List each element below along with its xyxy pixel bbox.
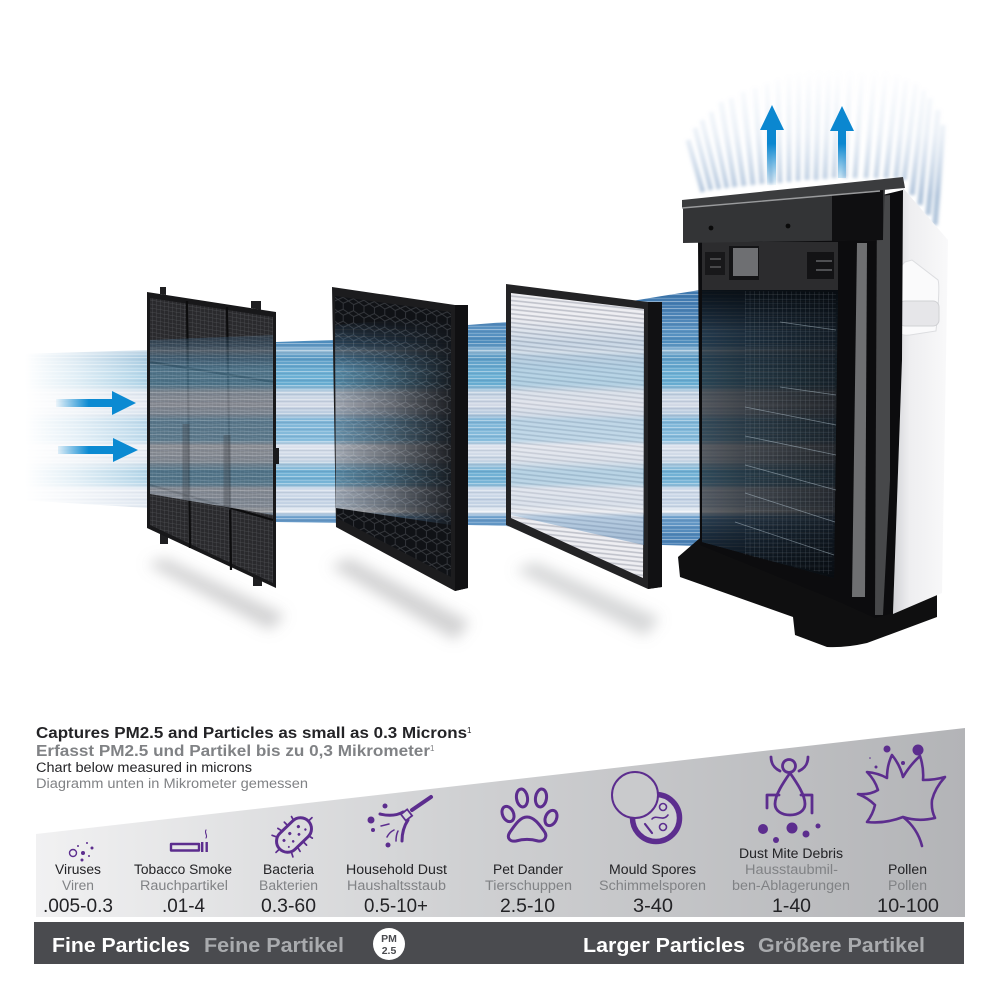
- legend bar: Feine Partikel: [204, 934, 344, 957]
- icon: PM2.5 badge: 2.5: [382, 945, 396, 957]
- filter 3: HEPA filter: [506, 284, 662, 589]
- item: bacteria: Bakterien: [259, 878, 318, 893]
- main black frame: [698, 190, 903, 618]
- item: bacteria: 0.3-60: [261, 896, 316, 917]
- item: tobacco smoke: Rauchpartikel: [140, 878, 228, 893]
- heading: Captures PM2.5 and Particles as small as 0.3 Microns: [36, 725, 467, 742]
- item: dust mite debris: Hausstaubmil-: [745, 862, 838, 877]
- shadow: filter 3: [515, 562, 660, 636]
- item: viruses: [43, 842, 113, 917]
- item: pet dander: Pet Dander: [493, 862, 564, 877]
- item: tobacco smoke: Tobacco Smoke: [134, 862, 232, 877]
- airflow band: [20, 290, 700, 546]
- legend bar: Größere Partikel: [758, 934, 925, 957]
- filter chamber: [702, 288, 838, 578]
- upward airflow rays: [688, 70, 943, 225]
- item: bacteria: Bacteria: [263, 862, 314, 877]
- icon: cigarette: [171, 830, 208, 852]
- side handle: [897, 260, 939, 335]
- item: bacteria: [259, 806, 323, 917]
- item: household dust: Household Dust: [346, 862, 447, 877]
- item: pet dander: 2.5-10: [500, 896, 555, 917]
- item: pollen: 10-100: [877, 896, 939, 917]
- legend bar: Fine Particles: [52, 934, 190, 957]
- shadow: filter 2: [330, 558, 470, 640]
- item: pollen: Pollen: [888, 878, 927, 893]
- base: [678, 538, 937, 647]
- arrow: outflow right: [830, 106, 854, 178]
- item: mould spores: [599, 772, 706, 917]
- white housing: [893, 188, 948, 614]
- item: viruses: Viruses: [55, 862, 101, 877]
- icon: petri dish: [612, 772, 680, 842]
- top lid: [682, 177, 905, 208]
- item: mould spores: Schimmelsporen: [599, 878, 706, 893]
- arrow: inflow top: [56, 391, 136, 415]
- icon: PM2.5 badge: [373, 928, 405, 960]
- arrow: outflow left: [760, 105, 784, 185]
- heading: Diagramm unten in Mikrometer gemessen: [36, 776, 308, 791]
- item: dust mite debris: ben-Ablagerungen: [732, 878, 850, 893]
- shadow: filter 1: [147, 558, 285, 630]
- control panel: [702, 242, 838, 290]
- filter 1: pre-filter: [147, 287, 279, 588]
- item: pet dander: Tierschuppen: [485, 878, 572, 893]
- item: viruses: .005-0.3: [43, 896, 113, 917]
- item: viruses: Viren: [62, 878, 94, 893]
- icon: vacuum nozzle: [368, 797, 431, 848]
- purifier unit: [678, 177, 948, 647]
- heading: 1: [467, 726, 472, 735]
- icon: bacterium: [265, 806, 323, 864]
- item: pollen: [858, 744, 945, 917]
- heading: Erfasst PM2.5 und Partikel bis zu 0,3 Mikrometer: [36, 743, 430, 760]
- item: dust mite debris: Dust Mite Debris: [739, 846, 843, 861]
- filter 2: carbon filter: [332, 287, 468, 591]
- item: dust mite debris: 1-40: [772, 896, 811, 917]
- legend bar: Larger Particles: [583, 934, 745, 957]
- item: household dust: Haushaltsstaub: [347, 878, 446, 893]
- icon: virus: [70, 842, 94, 862]
- particle size wedge: [36, 728, 965, 917]
- heading: Chart below measured in microns: [36, 760, 252, 775]
- icon: dust mite: [758, 757, 820, 843]
- arrow: inflow bottom: [58, 438, 138, 462]
- icon: PM2.5 badge: PM: [381, 933, 397, 945]
- item: tobacco smoke: .01-4: [162, 896, 205, 917]
- heading: 1: [430, 744, 435, 753]
- item: household dust: [346, 797, 447, 917]
- item: household dust: 0.5-10+: [364, 896, 428, 917]
- item: mould spores: Mould Spores: [609, 862, 696, 877]
- item: mould spores: 3-40: [633, 896, 673, 917]
- item: tobacco smoke: [134, 830, 232, 917]
- heading: [36, 725, 472, 791]
- top front band: [683, 188, 885, 243]
- frame highlight stripes: [852, 243, 867, 597]
- legend bar: [34, 922, 964, 964]
- icon: pollen flower: [858, 744, 945, 846]
- item: pet dander: [485, 788, 572, 917]
- item: dust mite debris: [732, 757, 850, 917]
- item: pollen: Pollen: [888, 862, 927, 877]
- icon: paw: [500, 788, 559, 841]
